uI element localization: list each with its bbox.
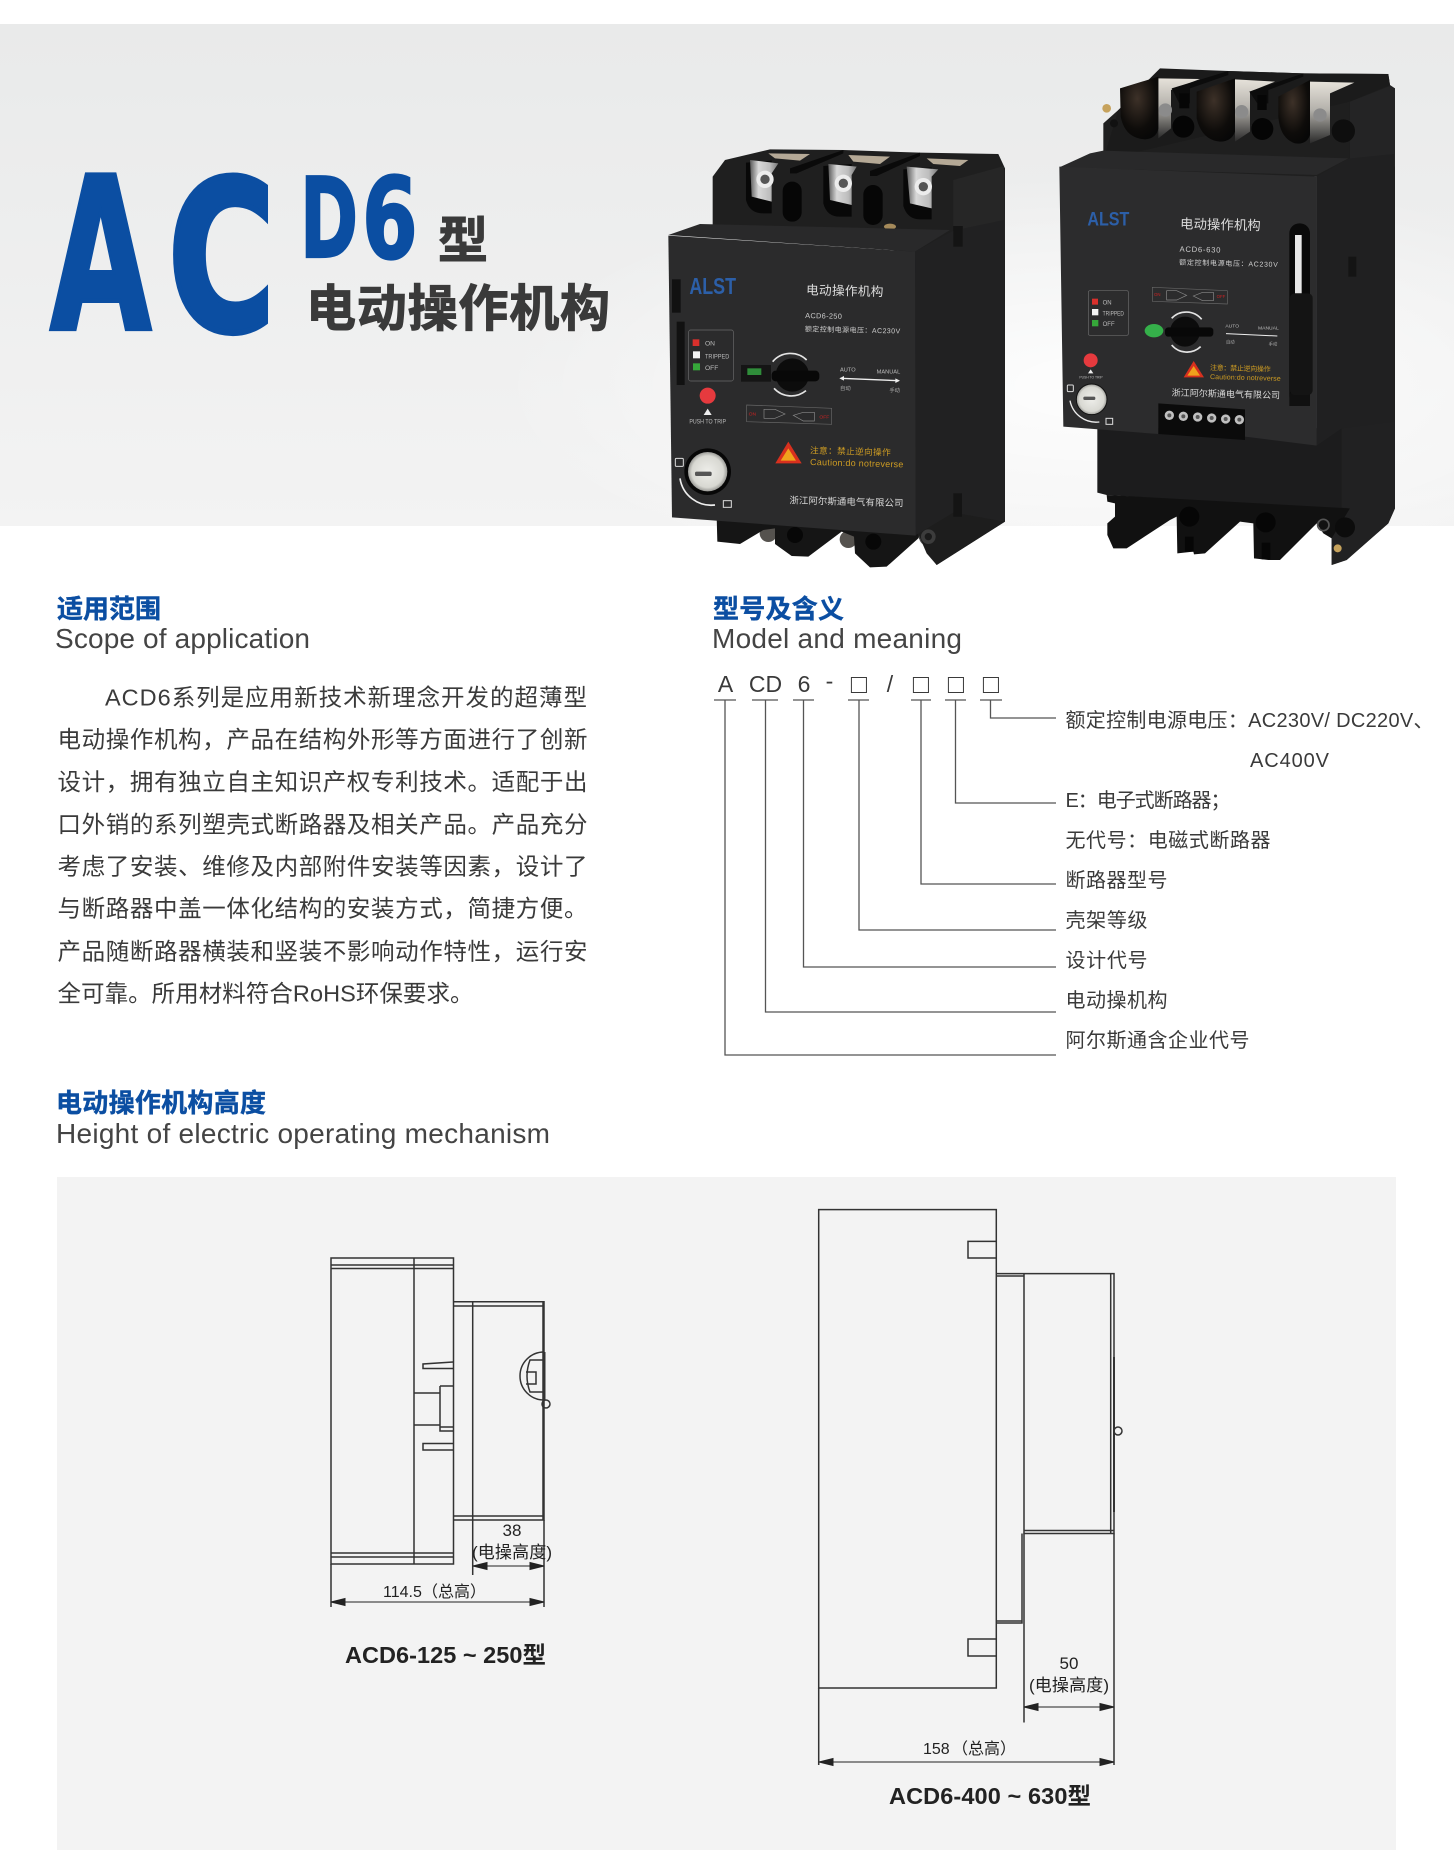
auto manual arrow: AUTO (1225, 324, 1239, 330)
model code: 6 (798, 671, 810, 697)
paragraph: scope description: 电动操作机构，产品在结构外形等方面进行了创新 (58, 726, 588, 752)
auto manual arrow: 自动 (1226, 338, 1235, 345)
title: ACD6型 电动操作机构 (50, 132, 610, 380)
title: ACD6型 电动操作机构: C (168, 138, 275, 380)
model labels: 阿尔斯通含企业代号 (1066, 1029, 1250, 1052)
panel text: 额定控制电源电压：AC230V (805, 324, 901, 335)
panel text: 电动操作机构 (1180, 216, 1261, 233)
wiring terminal strip (1158, 403, 1245, 440)
auto manual arrow (839, 368, 901, 394)
on off plate: OFF (819, 415, 829, 421)
panel text: ACD6-630 (1179, 245, 1221, 255)
paragraph: scope description: 全可靠。所用材料符合RoHS环保要求。 (58, 980, 474, 1006)
drawing title: ACD6-125 ~ 250型 (345, 1642, 546, 1668)
status indicators (689, 330, 733, 381)
model code: A (718, 671, 734, 697)
company: 浙江阿尔斯通电气有限公司 (789, 494, 904, 508)
model labels: 无代号：电磁式断路器 (1066, 829, 1270, 852)
dimension labels: 50 (1060, 1654, 1078, 1673)
dimension arrows (331, 1562, 544, 1606)
top terminals (746, 150, 1005, 247)
panel text: ACD6-250 (805, 311, 842, 321)
brand: ALST (689, 273, 736, 299)
warning: Caution:do notreverse (1210, 374, 1281, 383)
panel text (805, 282, 902, 335)
title: ACD6型 电动操作机构: 6 (362, 154, 418, 284)
dimension labels: 38 (503, 1521, 521, 1540)
status indicators: ON (705, 341, 715, 348)
bottom terminals (717, 513, 1005, 567)
dimension arrows (819, 1704, 1114, 1766)
dimension labels (923, 1654, 1109, 1758)
auto manual arrow: 自动 (840, 384, 851, 392)
dimension labels: 114.5 (383, 1584, 422, 1601)
status indicators: OFF (705, 365, 718, 372)
key lock (675, 448, 731, 507)
warning (775, 442, 904, 469)
drawing: ACD6-125~250 side view (331, 1258, 552, 1668)
warning: 注意：禁止逆向操作 (810, 444, 891, 457)
warning: Caution:do notreverse (810, 457, 904, 469)
model labels: 电动操机构 (1066, 989, 1168, 1012)
brand: ALST (1087, 209, 1130, 230)
model code: / (887, 671, 894, 697)
auto manual arrow: MANUAL (877, 369, 900, 375)
push to trip button: PUSH TO TRIP (689, 420, 726, 426)
housing (1100, 71, 1395, 565)
subheading: scope english: Scope of application (55, 623, 310, 654)
top face and front panel (668, 224, 950, 252)
subheading: model english: Model and meaning (712, 623, 962, 654)
status indicators: OFF (1103, 322, 1115, 328)
title: ACD6型 电动操作机构: 电动操作机构 (306, 281, 610, 337)
auto manual arrow: MANUAL (1258, 326, 1279, 332)
company: 浙江阿尔斯通电气有限公司 (1172, 387, 1280, 400)
model labels: 设计代号 (1066, 949, 1148, 972)
model labels: 断路器型号 (1066, 869, 1168, 892)
key lock (1067, 384, 1113, 424)
product photo: ACD6-630 (1059, 68, 1395, 565)
push to trip button: PUSH TO TRIP (1079, 375, 1103, 380)
push to trip button (689, 388, 726, 426)
dimension labels: (电操高度) (1029, 1676, 1109, 1695)
warning: 注意：禁止逆向操作 (1210, 363, 1271, 374)
paragraph: scope description: 设计，拥有独立自主知识产权专利技术。适配于出 (58, 769, 588, 795)
slider handle (1289, 223, 1356, 406)
top face and front panel (1059, 151, 1348, 175)
model code (718, 668, 1000, 699)
paragraph: scope description: ACD6系列是应用新技术新理念开发的超薄型 (105, 684, 587, 710)
rotary handle (1145, 312, 1213, 352)
top terminals (1102, 71, 1395, 167)
model labels: 壳架等级 (1066, 909, 1148, 932)
paragraph: scope description: 口外销的系列塑壳式断路器及相关产品。产品充分 (58, 812, 588, 838)
dimension labels (383, 1521, 552, 1601)
paragraph: scope description (58, 684, 588, 1006)
dimension labels: 158 (923, 1741, 950, 1758)
panel: dimension drawings (57, 1177, 1396, 1850)
status indicators: TRIPPED (1103, 312, 1125, 318)
heading: scope: 适用范围 (57, 594, 161, 624)
auto manual arrow: AUTO (840, 368, 856, 374)
model code: □ (948, 669, 965, 699)
push to trip button (1079, 353, 1103, 380)
paragraph: scope description: 与断路器中盖一体化结构的安装方式，简捷方便。 (58, 896, 588, 922)
rotary handle (741, 353, 819, 396)
product photo: ACD6-250 (668, 149, 1005, 567)
model code: □ (851, 669, 868, 699)
warning (1184, 361, 1281, 383)
heading: model: 型号及含义 (713, 594, 844, 624)
model code: CD (749, 671, 782, 697)
title: ACD6型 电动操作机构: 型 (438, 213, 488, 269)
heading: height: 电动操作机构高度 (56, 1088, 266, 1118)
paragraph: scope description: 考虑了安装、维修及内部附件安装等因素，设计了 (58, 854, 588, 880)
hero background band (0, 24, 1454, 526)
section: model and meaning (712, 594, 1434, 1055)
panel text: 电动操作机构 (806, 282, 884, 299)
status indicators (1088, 291, 1128, 335)
on off plate: ON (1154, 292, 1160, 297)
on off plate (747, 405, 832, 424)
title: ACD6型 电动操作机构: D (300, 154, 358, 283)
auto manual arrow (1225, 324, 1279, 347)
model code: □ (983, 669, 1000, 699)
subheading: height english: Height of electric operating mechanism (56, 1118, 550, 1149)
model labels: AC400V (1250, 750, 1330, 772)
drawing title: ACD6-400 ~ 630型 (889, 1783, 1091, 1809)
left side latch (672, 279, 685, 385)
model labels: E：电子式断路器； (1066, 789, 1230, 812)
on off plate: OFF (1217, 294, 1226, 299)
title: ACD6型 电动操作机构: A (50, 132, 151, 380)
auto manual arrow: 手动 (889, 386, 901, 394)
leader lines (714, 700, 1056, 1055)
status indicators: TRIPPED (705, 353, 729, 360)
section: scope of application (55, 594, 588, 1006)
model labels: 额定控制电源电压：AC230V/ DC220V、 (1066, 709, 1434, 732)
panel text: 额定控制电源电压：AC230V (1179, 258, 1278, 269)
dimension labels: （总高） (422, 1583, 486, 1601)
status indicators: ON (1103, 301, 1112, 307)
section heading: height (56, 1088, 550, 1149)
auto manual arrow: 手动 (1269, 340, 1278, 347)
dimension labels: （总高） (952, 1740, 1016, 1758)
panel text (1179, 216, 1279, 269)
housing (713, 149, 1005, 565)
paragraph: scope description: 产品随断路器横装和竖装不影响动作特性，运行安 (58, 938, 588, 964)
lower body (1097, 420, 1395, 565)
model code: □ (913, 669, 930, 699)
on off plate: ON (749, 411, 757, 417)
model code: - (826, 668, 833, 694)
model labels (1066, 709, 1434, 1052)
on off plate (1152, 287, 1227, 304)
dimension labels: (电操高度) (472, 1543, 552, 1562)
drawing: ACD6-400~630 side view (819, 1210, 1122, 1809)
